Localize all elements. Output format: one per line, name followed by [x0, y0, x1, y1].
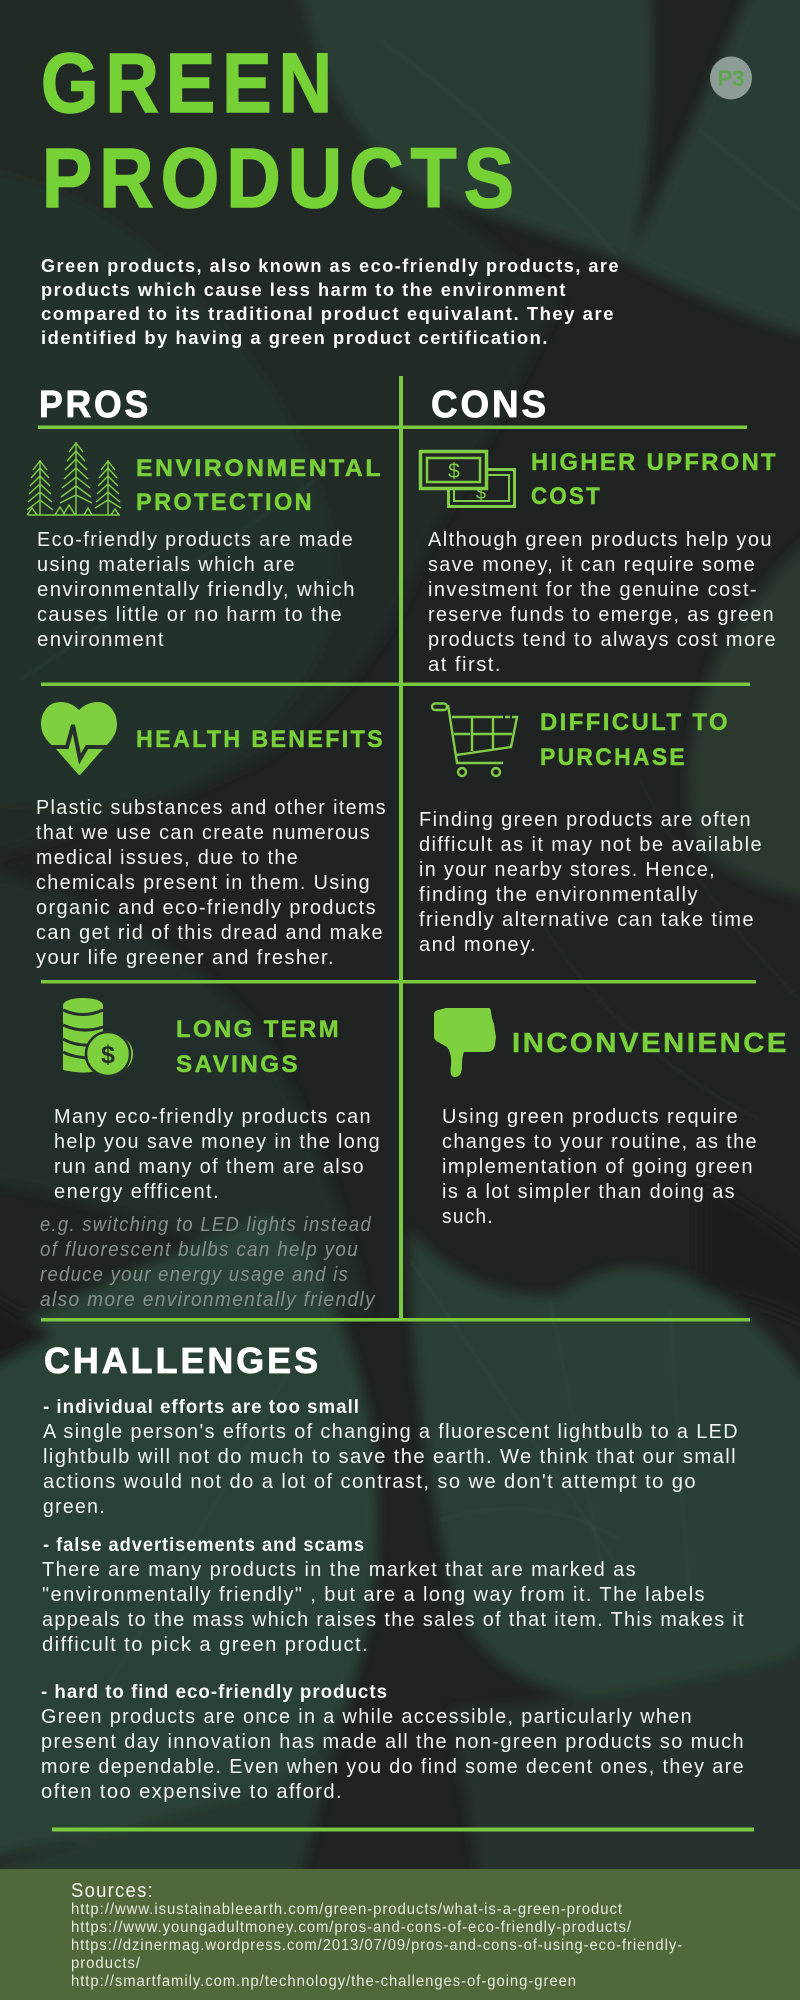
challenge 2: [42, 1535, 745, 1656]
body text: [428, 529, 777, 676]
intro paragraph: compared to its traditional product equivalant. They are: [41, 304, 615, 324]
intro paragraph: [41, 256, 620, 348]
page badge P3: P3: [718, 66, 744, 91]
challenge 2: appeals to the mass which raises the sales of that item. This makes it: [42, 1609, 745, 1631]
example note: also more environmentally friendly: [40, 1289, 376, 1311]
body text: investment for the genuine cost-: [428, 579, 758, 601]
challenge 1: actions would not do a lot of contrast, so we don't attempt to go: [43, 1471, 697, 1493]
heading: [540, 709, 730, 771]
icon: banknotes: $: [476, 483, 486, 503]
challenge 1: - individual efforts are too small: [43, 1397, 360, 1418]
body text: run and many of them are also: [54, 1156, 365, 1178]
example note: reduce your energy usage and is: [40, 1264, 349, 1286]
body text: such.: [442, 1206, 494, 1228]
heading: HIGHER UPFRONT: [531, 449, 778, 476]
heading: LONG TERM: [176, 1016, 341, 1043]
body text: [419, 809, 763, 956]
panel: inconvenience: [434, 1008, 789, 1228]
body text: Finding green products are often: [419, 809, 752, 831]
challenge 1: A single person's efforts of changing a fluorescent lightbulb to a LED: [43, 1421, 739, 1443]
body text: friendly alternative can take time: [419, 909, 755, 931]
challenge 2: There are many products in the market that are marked as: [42, 1559, 637, 1581]
body text: finding the environmentally: [419, 884, 699, 906]
icon: thumbs down: [434, 1008, 496, 1077]
challenge 1: lightbulb will not do much to save the earth. We think that our small: [43, 1446, 737, 1468]
heading: cons: CONS: [431, 384, 549, 426]
icon: pine trees: [27, 442, 121, 515]
challenge 3: present day innovation has made all the non-green products so much: [41, 1731, 745, 1753]
panel: higher upfront cost: [420, 449, 778, 676]
challenge 3: more dependable. Even when you do find some decent ones, they are: [41, 1756, 745, 1778]
body text: environment: [37, 629, 165, 651]
icon: shopping cart: [432, 704, 517, 776]
challenge 1: [43, 1397, 739, 1518]
page badge P3: [710, 56, 752, 100]
challenge 2: - false advertisements and scams: [43, 1535, 365, 1556]
source links: http://www.isustainableearth.com/green-products/what-is-a-green-product: [71, 1901, 623, 1918]
heading: ENVIRONMENTAL: [136, 455, 383, 482]
body text: reserve funds to emerge, as green: [428, 604, 775, 626]
icon: coin stack: $: [101, 1041, 115, 1069]
source links: http://smartfamily.com.np/technology/the-challenges-of-going-green: [71, 1973, 577, 1990]
heading: INCONVENIENCE: [512, 1027, 789, 1058]
heading: PROTECTION: [136, 489, 314, 516]
body text: [442, 1106, 758, 1228]
body text: products tend to always cost more: [428, 629, 777, 651]
body text: Although green products help you: [428, 529, 773, 551]
body text: that we use can create numerous: [36, 822, 371, 844]
body text: Plastic substances and other items: [36, 797, 387, 819]
panel: long term savings: [40, 998, 381, 1311]
icon: heart with pulse: [41, 702, 117, 775]
challenge 2: difficult to pick a green product.: [42, 1634, 369, 1656]
heading: HEALTH BENEFITS: [136, 726, 385, 753]
sources heading: Sources:: [71, 1880, 154, 1902]
body text: medical issues, due to the: [36, 847, 299, 869]
intro paragraph: products which cause less harm to the environment: [41, 280, 567, 300]
challenge 3: [41, 1682, 745, 1803]
icon: coin stack: [63, 998, 134, 1076]
heading: COST: [531, 483, 602, 510]
heading: PURCHASE: [540, 744, 687, 771]
heading: [531, 449, 778, 510]
body text: [54, 1106, 381, 1203]
body text: changes to your routine, as the: [442, 1131, 758, 1153]
body text: implementation of going green: [442, 1156, 754, 1178]
icon: banknotes: [420, 452, 514, 506]
challenge 3: - hard to find eco-friendly products: [41, 1682, 388, 1703]
panel: challenges: [41, 1340, 745, 1803]
source links: products/: [71, 1955, 141, 1972]
source links: https://dzinermag.wordpress.com/2013/07/09/pros-and-cons-of-using-eco-friendly-: [71, 1937, 683, 1954]
body text: your life greener and fresher.: [36, 947, 335, 969]
title: [41, 36, 521, 225]
body text: at first.: [428, 654, 502, 676]
title: PRODUCTS: [42, 131, 521, 225]
challenge 2: "environmentally friendly" , but are a long way from it. The labels: [42, 1584, 706, 1606]
body text: help you save money in the long: [54, 1131, 381, 1153]
body text: using materials which are: [37, 554, 296, 576]
divider grid: [38, 376, 756, 1322]
body text: Eco-friendly products are made: [37, 529, 354, 551]
panel: health benefits: [36, 702, 387, 969]
challenge 3: Green products are once in a while accessible, particularly when: [41, 1706, 693, 1728]
body text: organic and eco-friendly products: [36, 897, 377, 919]
body text: [36, 797, 387, 969]
heading: [136, 455, 383, 516]
body text: [37, 529, 356, 651]
intro paragraph: identified by having a green product certification.: [41, 328, 549, 348]
panel: environmental protection: [27, 442, 383, 651]
challenge 1: green.: [43, 1496, 106, 1518]
body text: in your nearby stores. Hence,: [419, 859, 716, 881]
body text: can get rid of this dread and make: [36, 922, 384, 944]
heading: SAVINGS: [176, 1051, 300, 1078]
heading: DIFFICULT TO: [540, 709, 730, 736]
example note: of fluorescent bulbs can help you: [40, 1239, 359, 1261]
heading: challenges: CHALLENGES: [44, 1340, 321, 1381]
example note: e.g. switching to LED lights instead: [40, 1214, 372, 1236]
icon: banknotes: $: [448, 460, 460, 483]
body text: environmentally friendly, which: [37, 579, 356, 601]
source links: [71, 1901, 683, 1990]
example note: [40, 1214, 376, 1311]
sources band: [0, 1869, 800, 2000]
body text: Using green products require: [442, 1106, 739, 1128]
body text: Many eco-friendly products can: [54, 1106, 372, 1128]
panel: difficult to purchase: [419, 704, 763, 956]
heading: [176, 1016, 341, 1078]
body text: is a lot simpler than doing as: [442, 1181, 736, 1203]
challenge 3: often too expensive to afford.: [41, 1781, 343, 1803]
body text: energy effficent.: [54, 1181, 220, 1203]
heading: pros: PROS: [39, 384, 151, 426]
body text: chemicals present in them. Using: [36, 872, 371, 894]
body text: save money, it can require some: [428, 554, 756, 576]
body text: causes little or no harm to the: [37, 604, 343, 626]
body text: and money.: [419, 934, 537, 956]
title: GREEN: [41, 36, 339, 130]
body text: difficult as it may not be available: [419, 834, 763, 856]
source links: https://www.youngadultmoney.com/pros-and-cons-of-eco-friendly-products/: [71, 1919, 632, 1936]
intro paragraph: Green products, also known as eco-friendly products, are: [41, 256, 620, 276]
